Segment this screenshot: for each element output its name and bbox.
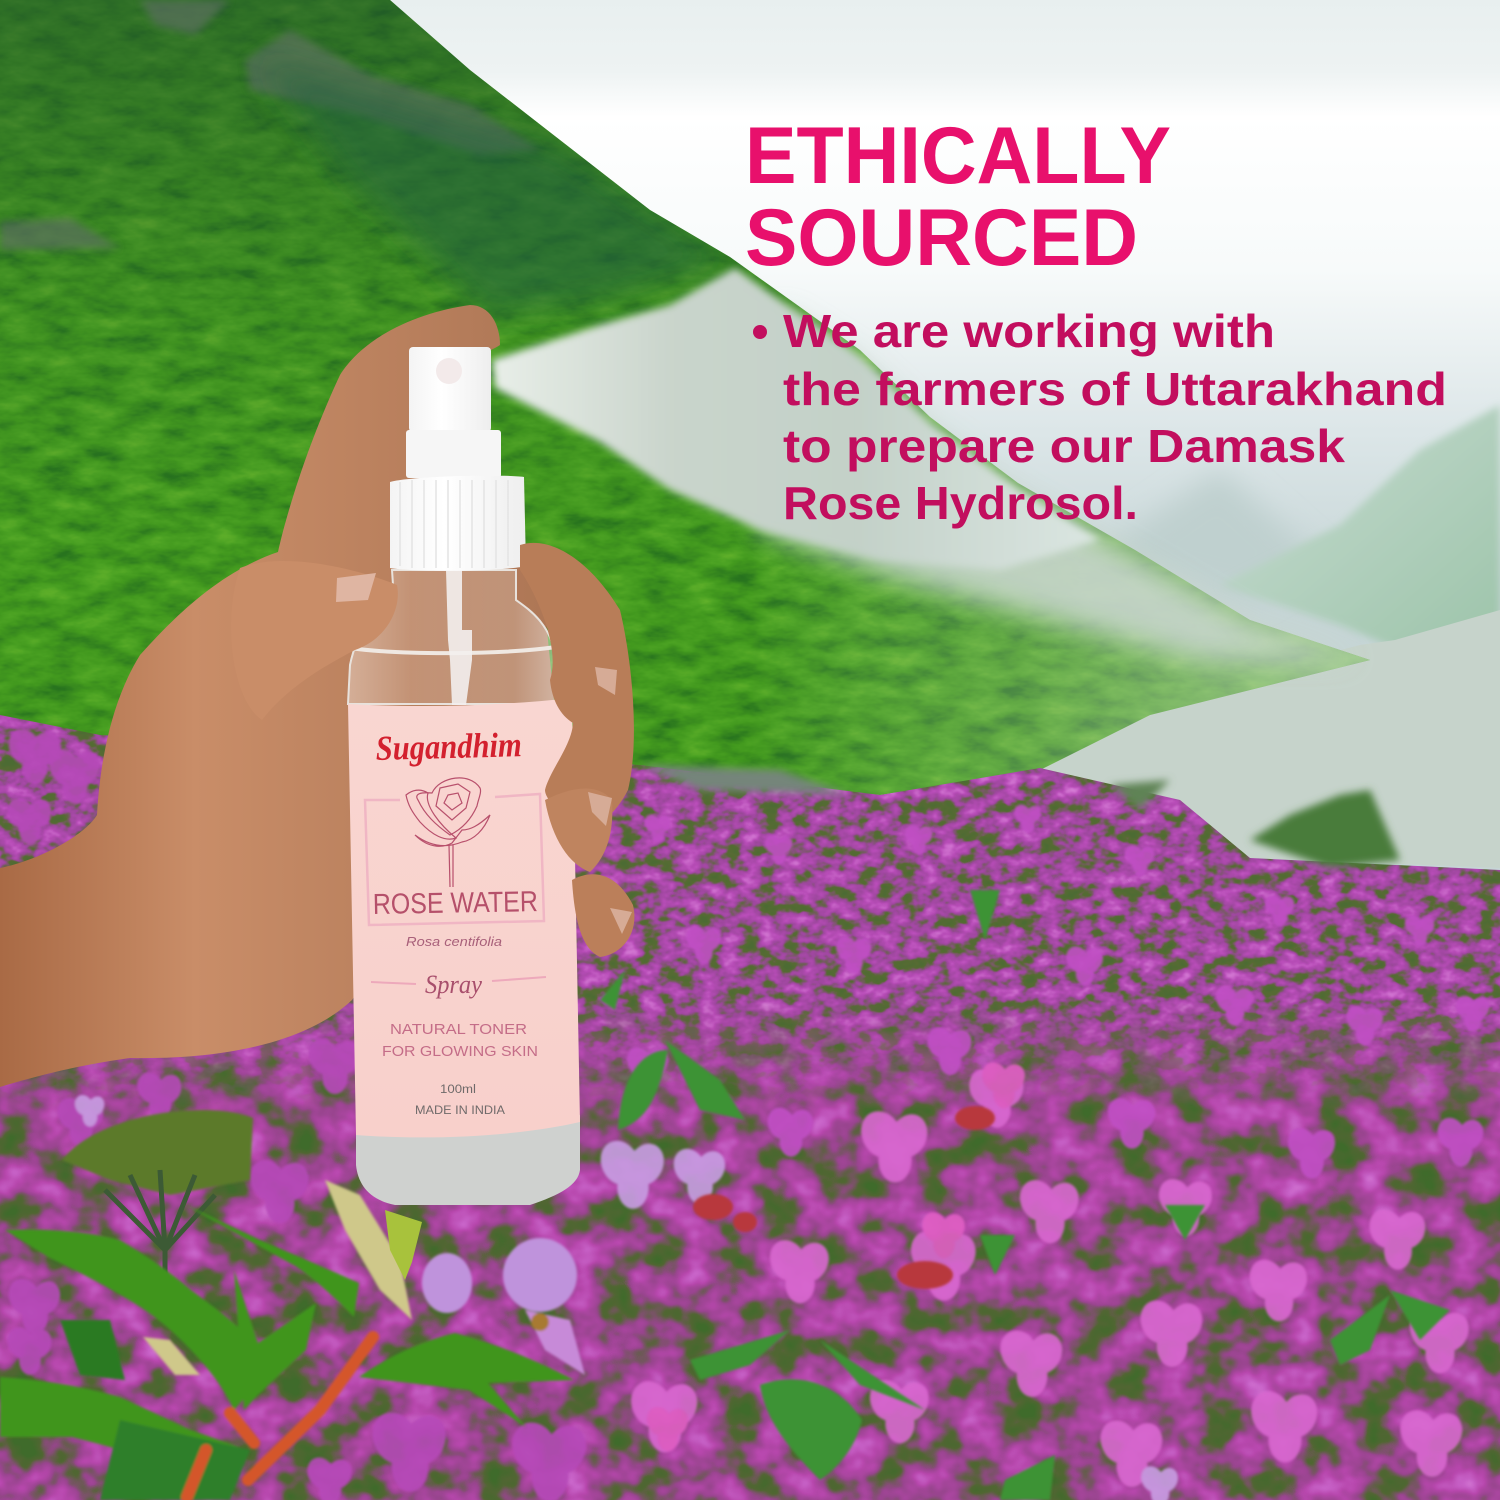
volume and origin: 100ml — [440, 1084, 476, 1096]
bottle: screw collar — [390, 476, 526, 571]
bullet text block: the farmers of Uttarakhand — [783, 363, 1447, 415]
bottle: spray nozzle — [406, 347, 501, 478]
volume and origin — [415, 1084, 505, 1117]
benefit text: FOR GLOWING SKIN — [382, 1043, 538, 1060]
red buds — [693, 1106, 995, 1289]
red stems — [187, 1337, 373, 1497]
frame lines — [365, 794, 544, 925]
flower clusters — [2, 724, 1493, 1500]
hand: forearm and palm — [0, 305, 556, 1087]
background: far valley mountains — [1090, 405, 1500, 692]
bullet text block — [753, 305, 1447, 529]
bullet dot — [753, 325, 767, 339]
icon: rose line art — [406, 778, 490, 887]
bullet text block: Rose Hydrosol. — [783, 477, 1138, 529]
yellow-green leaf — [385, 1210, 422, 1280]
background: stony river bed — [1030, 610, 1500, 868]
moss shrub — [62, 1110, 253, 1195]
distant shrubs by the river — [640, 765, 1400, 868]
spray label: Spray — [425, 970, 482, 999]
bottle: clear shoulder — [348, 570, 556, 704]
background: green mountainside — [0, 0, 1500, 800]
large foreground leaves — [0, 890, 1450, 1500]
spray mist cloud — [492, 268, 1360, 660]
pale bud sprays — [143, 1180, 412, 1375]
hand: thumb nail — [336, 573, 376, 602]
spray label — [371, 970, 546, 999]
bullet text block: to prepare our Damask — [783, 420, 1345, 472]
foreground lavender blooms — [422, 1238, 585, 1375]
grass tuft — [105, 1170, 215, 1300]
botanical name: Rosa centifolia — [406, 934, 502, 949]
benefit text — [382, 1021, 538, 1060]
product hand and bottle — [0, 305, 634, 1205]
dark ridge shadow — [260, 60, 730, 315]
volume and origin: MADE IN INDIA — [415, 1105, 505, 1117]
product name: ROSE WATER — [373, 886, 538, 921]
flower field: far section — [0, 700, 1500, 1120]
flower field: near section — [0, 1000, 1500, 1500]
benefit text: NATURAL TONER — [390, 1021, 527, 1038]
hand: finger nails — [588, 667, 632, 934]
hand: right fingers — [520, 543, 634, 957]
bottle: label — [348, 698, 580, 1137]
heading: SOURCED — [745, 193, 1138, 283]
bullet text block: We are working with — [783, 305, 1275, 357]
bottle: liquid level — [350, 647, 556, 653]
bottle: dip tube — [446, 570, 472, 705]
heading — [745, 111, 1171, 283]
background: misty sky — [0, 0, 1500, 900]
brand name: Sugandhim — [375, 725, 522, 768]
bottle: clear base — [356, 1115, 580, 1205]
heading: ETHICALLY — [745, 111, 1171, 201]
rocky patches — [0, 0, 540, 250]
hand: thumb — [231, 561, 398, 720]
